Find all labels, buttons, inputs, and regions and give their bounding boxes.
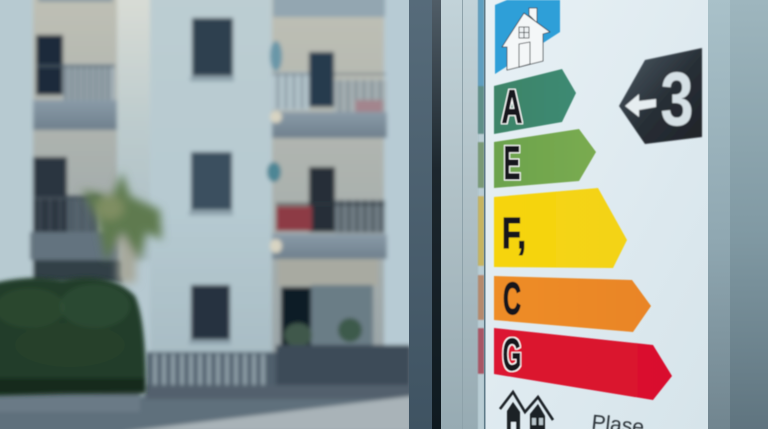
left upper door <box>36 35 63 95</box>
right frame <box>706 0 768 429</box>
wall lamps <box>270 41 282 71</box>
house outline <box>502 8 550 70</box>
label panel <box>485 0 708 429</box>
left lower door <box>33 157 67 232</box>
post side face <box>441 0 478 429</box>
right lower slab <box>272 234 387 259</box>
fence <box>147 352 282 400</box>
right upper slab <box>272 112 387 138</box>
rating arrow A <box>494 69 576 134</box>
rating arrow F: F, <box>502 209 526 258</box>
road <box>0 396 420 429</box>
right lower door <box>309 167 335 232</box>
central wall <box>150 0 272 355</box>
rating arrow E <box>494 129 596 189</box>
rating arrow A: A <box>502 80 522 133</box>
icon: blue house tile <box>495 0 560 74</box>
left upper railing <box>63 64 115 102</box>
slate post face <box>409 0 432 429</box>
blurred apartment building background <box>0 0 420 429</box>
panel edge line <box>484 0 486 429</box>
red balcony planter <box>276 206 312 231</box>
energy scale arrows <box>494 69 672 400</box>
rating arrow G: G <box>502 329 522 380</box>
top slabs <box>273 0 385 17</box>
rating arrow C: C <box>503 273 521 324</box>
far right wall <box>384 0 414 345</box>
central lower window <box>191 285 230 340</box>
arrow glyph <box>625 94 656 117</box>
rating arrow F <box>494 188 627 268</box>
number: 3 <box>660 57 694 142</box>
icon: two dark houses <box>500 392 553 429</box>
black rating sign with arrow and number <box>619 48 702 144</box>
central upper window <box>192 18 233 76</box>
right lower railing <box>335 200 385 233</box>
left balcony recess <box>33 0 117 280</box>
right upper railing <box>272 72 309 110</box>
left lower railing <box>67 195 99 232</box>
left upper balcony slab <box>33 100 117 130</box>
left building column <box>0 0 33 280</box>
terrace shrubs <box>284 323 312 347</box>
blurred palm tree <box>82 172 162 283</box>
right balcony recess <box>272 0 384 355</box>
left lower balcony slab <box>30 232 120 260</box>
window sill shadows <box>189 79 234 342</box>
ground floor entrance <box>311 285 373 350</box>
rating arrow E: E <box>504 136 520 189</box>
dark post edge <box>432 0 441 429</box>
colour strip on panel edge <box>478 0 484 429</box>
bright wall edge <box>117 0 155 260</box>
green hedge <box>0 277 146 396</box>
rating arrow G <box>494 328 672 400</box>
right upper door <box>309 52 334 107</box>
central middle window <box>191 152 232 210</box>
rating arrow C <box>494 273 651 332</box>
